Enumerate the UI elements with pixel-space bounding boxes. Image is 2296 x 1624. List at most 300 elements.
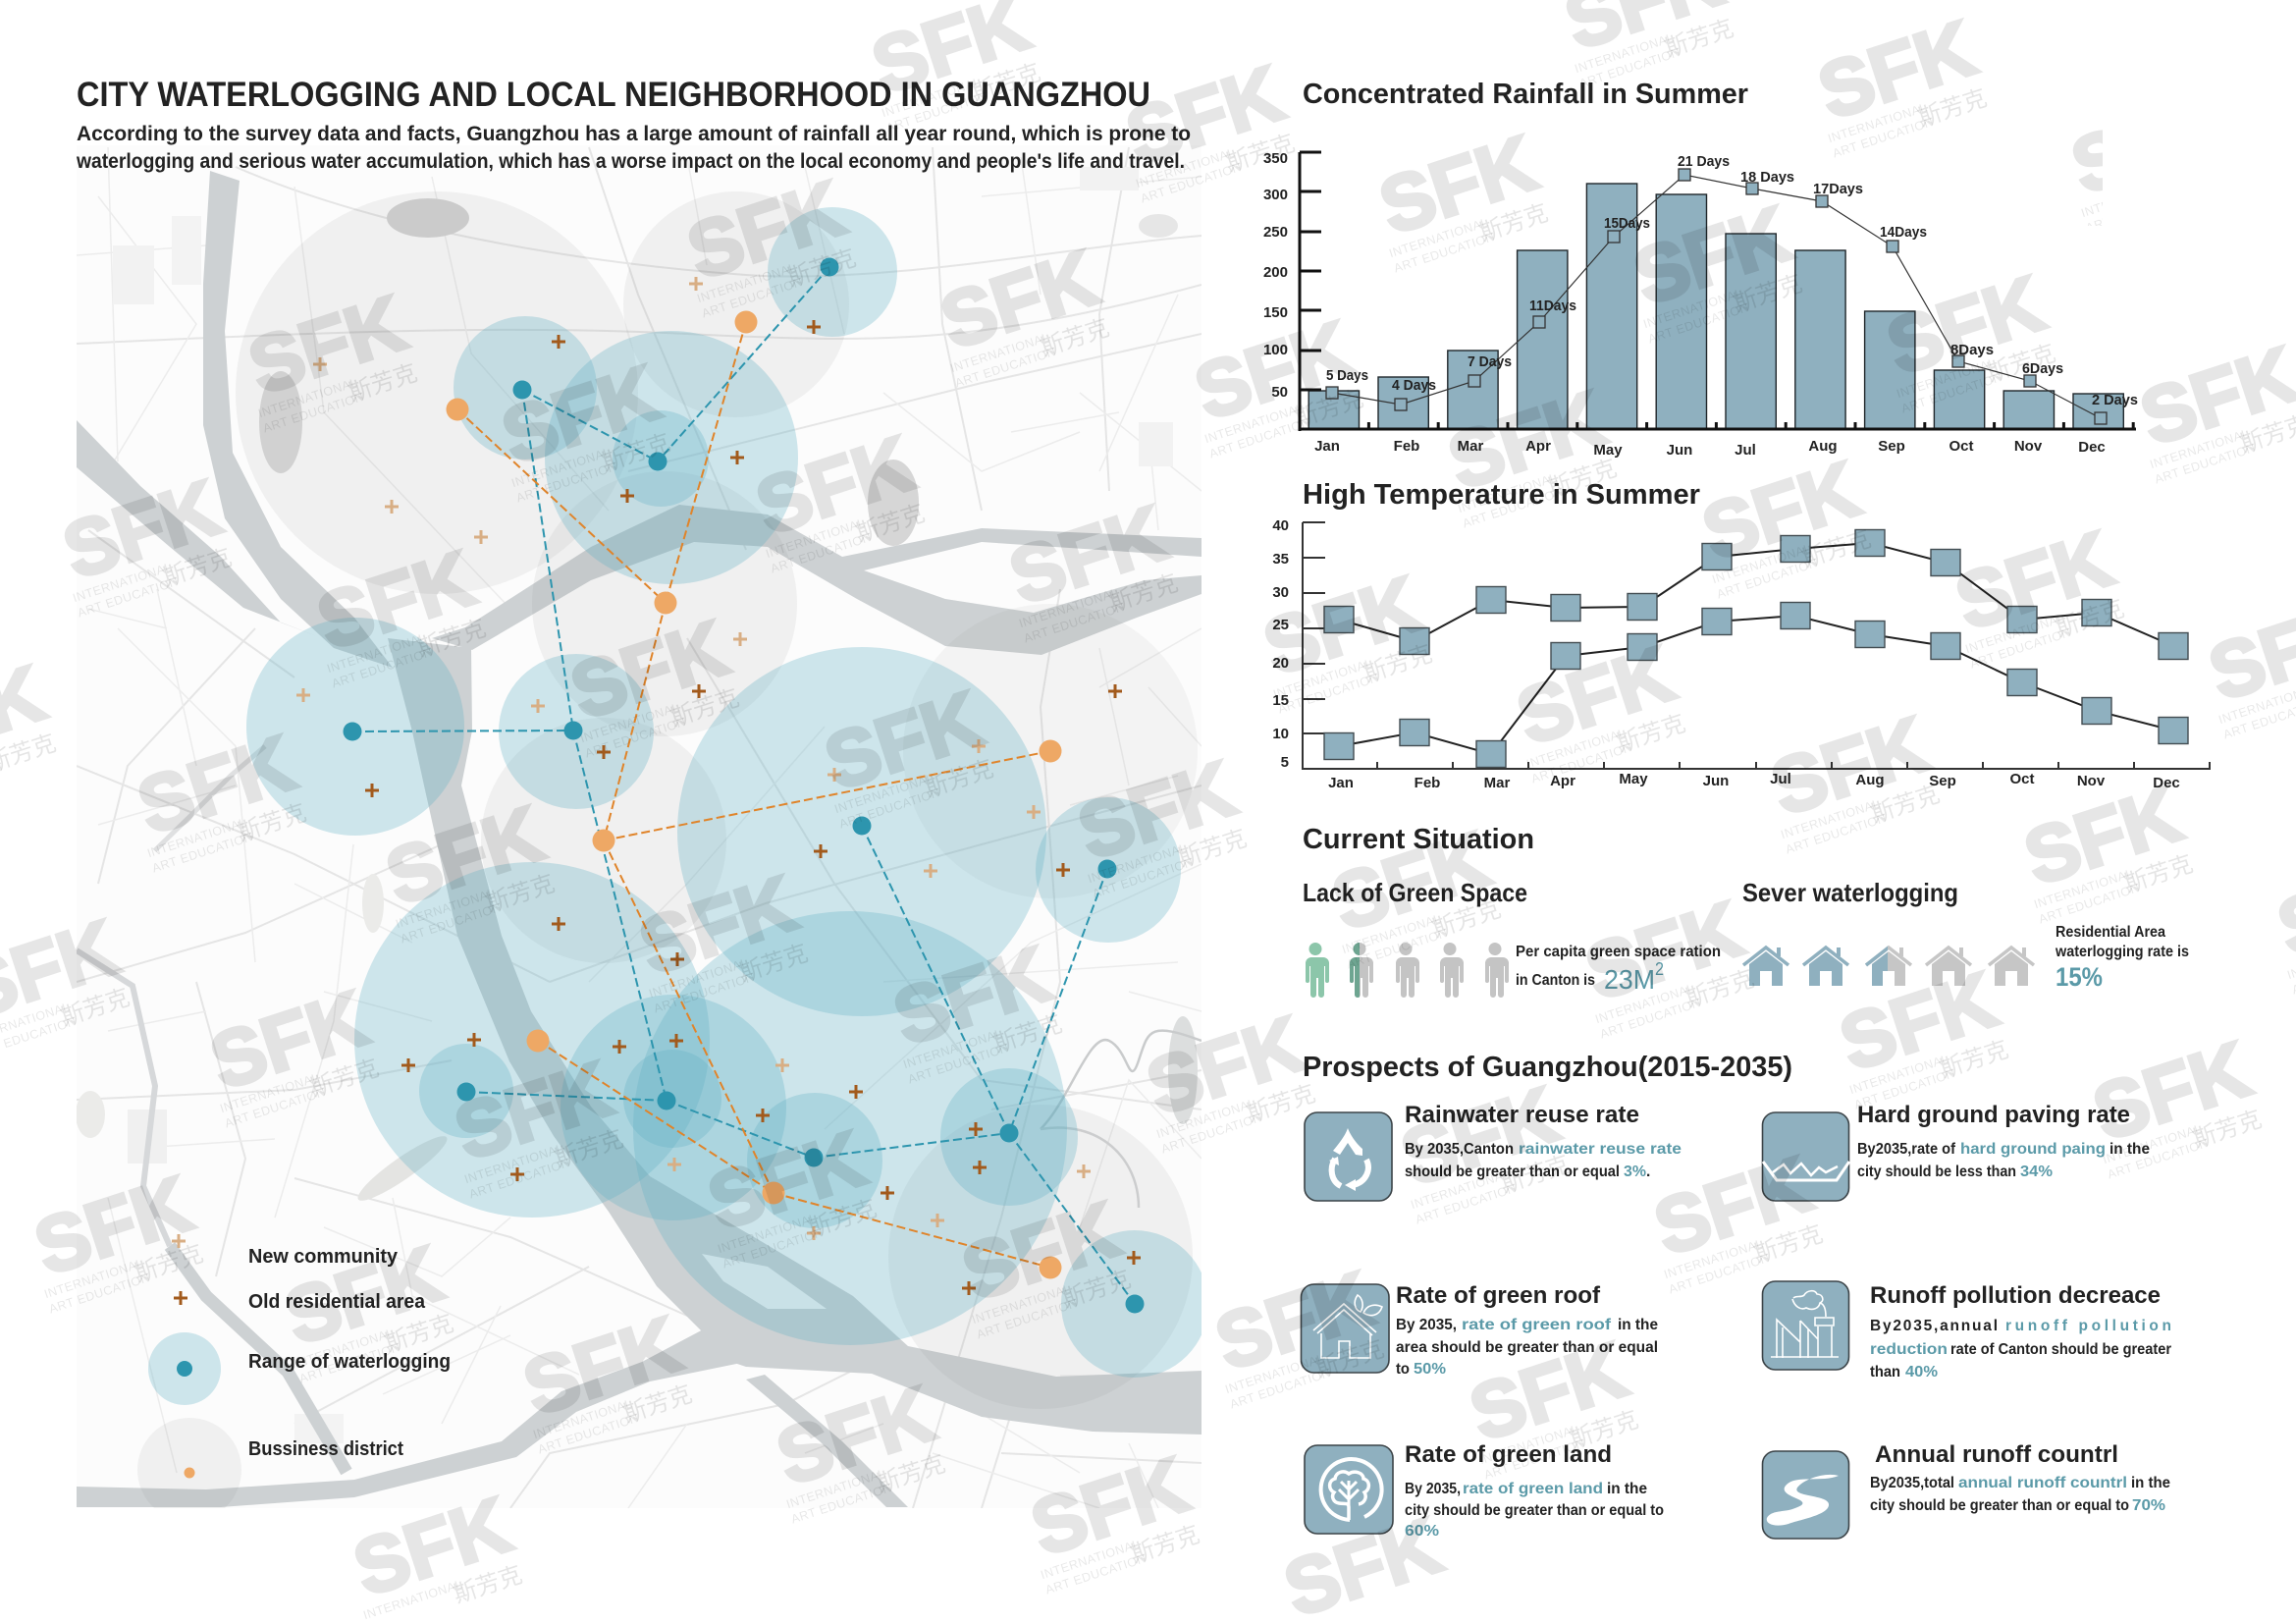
map legend: Old residential area <box>248 1291 426 1313</box>
watermark pattern: INTERNATIONAL <box>901 1026 1004 1071</box>
bar chart: rainfall with rainy days line: 7 Days <box>1468 354 1512 370</box>
description: rate of green roof <box>1462 1317 1612 1333</box>
watermark pattern: INTERNATIONAL <box>784 1466 887 1511</box>
watermark pattern: SFK <box>1021 1440 1198 1572</box>
panel: sever waterlogging: Sever waterlogging <box>1742 878 1958 907</box>
watermark pattern: INTERNATIONAL <box>531 1396 634 1441</box>
watermark pattern: SFK <box>767 1370 943 1501</box>
watermark pattern: 斯芳克 <box>1312 1335 1387 1382</box>
watermark pattern: 斯芳克 <box>667 684 742 731</box>
watermark pattern: ART EDUCATION <box>1414 1181 1519 1226</box>
line chart: high and low temperature: 5 <box>1281 754 1289 771</box>
icon: houses row <box>1743 947 2034 986</box>
watermark pattern: SFK <box>275 1229 452 1361</box>
watermark pattern: 斯芳克 <box>2190 1106 2265 1153</box>
panel: rate of green land <box>1305 1441 1664 1540</box>
description: rainwater reuse rate <box>1519 1141 1682 1158</box>
watermark pattern: SFK <box>999 489 1176 621</box>
watermark pattern: ART EDUCATION <box>884 89 989 135</box>
watermark pattern: 斯芳克 <box>2053 595 2127 642</box>
watermark pattern: SFK <box>1575 885 1752 1016</box>
business district network lines <box>457 322 1050 1268</box>
watermark pattern: 斯芳克 <box>853 500 928 547</box>
watermark pattern: ART EDUCATION <box>514 460 619 505</box>
watermark pattern: SFK <box>1830 955 2006 1087</box>
watermark pattern: INTERNATIONAL <box>1895 355 1998 401</box>
watermark pattern: INTERNATIONAL <box>462 1141 565 1186</box>
watermark pattern: SFK <box>2061 79 2238 210</box>
watermark pattern: INTERNATIONAL <box>1477 1422 1580 1467</box>
heading: Runoff pollution decreace <box>1870 1282 2161 1309</box>
watermark pattern: ART EDUCATION <box>1646 300 1751 346</box>
watermark pattern: INTERNATIONAL <box>716 1211 819 1256</box>
description <box>1405 1141 1682 1180</box>
watermark pattern: INTERNATIONAL <box>42 1256 145 1301</box>
description: than <box>1870 1364 1900 1380</box>
green space statistic: 23M <box>1604 964 1655 995</box>
watermark pattern: ART EDUCATION <box>1852 1066 1957 1111</box>
watermark pattern: ART EDUCATION <box>2106 1136 2211 1181</box>
description: 34% <box>2020 1164 2053 1180</box>
watermark pattern: ART EDUCATION <box>1784 811 1889 856</box>
watermark pattern: ART EDUCATION <box>1667 1251 1772 1296</box>
watermark pattern: 斯芳克 <box>784 244 859 292</box>
description: in the <box>1607 1481 1647 1497</box>
watermark pattern: INTERNATIONAL <box>1134 145 1237 190</box>
watermark pattern: INTERNATIONAL <box>1154 1096 1257 1141</box>
bar chart: rainfall with rainy days line: Jan <box>1314 438 1340 455</box>
bar chart: rainfall with rainy days line: 150 <box>1263 304 1288 321</box>
watermark pattern: 斯芳克 <box>1244 1080 1318 1127</box>
waterlogging statistic <box>2055 924 2189 992</box>
watermark pattern: INTERNATIONAL <box>218 1070 321 1115</box>
description: annual runoff countrl <box>1958 1475 2127 1491</box>
watermark pattern: 斯芳克 <box>922 755 996 802</box>
icon: factory with smoke <box>1763 1281 1849 1370</box>
bar chart: rainfall with rainy days line: 200 <box>1263 264 1288 281</box>
watermark pattern: SFK <box>1692 445 1869 576</box>
watermark pattern: INTERNATIONAL <box>1662 1236 1765 1281</box>
watermark pattern: INTERNATIONAL <box>1223 1351 1326 1396</box>
green space statistic: 2 <box>1655 959 1664 979</box>
watermark pattern: SFK <box>1322 815 1499 947</box>
line chart: high and low temperature: Aug <box>1855 772 1885 788</box>
intro text: According to the survey data and facts, Guangzhou has a large amount of rainfall all year round, which is prone to <box>77 123 1191 145</box>
intro text <box>76 123 1191 173</box>
watermark pattern: SFK <box>25 1160 201 1291</box>
bar chart: rainfall with rainy days line: 18 Days <box>1740 170 1794 186</box>
watermark pattern: ART EDUCATION <box>150 830 255 875</box>
watermark pattern: 斯芳克 <box>1292 385 1366 432</box>
watermark pattern: INTERNATIONAL <box>1641 286 1744 331</box>
watermark pattern: SFK <box>492 349 668 480</box>
watermark pattern: INTERNATIONAL <box>1387 215 1490 260</box>
description <box>1396 1317 1658 1378</box>
watermark pattern: ART EDUCATION <box>2037 881 2142 926</box>
watermark pattern: ART EDUCATION <box>1228 1366 1333 1411</box>
watermark pattern: SFK <box>815 675 991 806</box>
description: should be greater than or equal <box>1405 1164 1620 1180</box>
watermark pattern: ART EDUCATION <box>700 275 805 320</box>
bar chart: rainfall with rainy days line: 15Days <box>1604 216 1650 232</box>
watermark pattern: INTERNATIONAL <box>145 815 248 860</box>
bar chart: rainfall with rainy days line: Sep <box>1878 438 1905 455</box>
watermark pattern: 斯芳克 <box>1731 270 1805 317</box>
watermark pattern: INTERNATIONAL <box>1963 611 2066 656</box>
line chart: high and low temperature: 35 <box>1272 551 1289 568</box>
waterlogging statistic: 15% <box>2056 962 2103 992</box>
bar chart: rainfall with rainy days line: 300 <box>1263 187 1288 203</box>
waterlogging statistic: Residential Area <box>2056 924 2165 941</box>
watermark pattern: 斯芳克 <box>1476 199 1551 246</box>
line chart: high and low temperature: Apr <box>1550 773 1575 789</box>
watermark pattern: 斯芳克 <box>874 1450 948 1497</box>
description: in the <box>1618 1317 1658 1333</box>
description: city should be greater than or equal to <box>1870 1497 2129 1514</box>
watermark pattern: SFK <box>1068 744 1245 876</box>
watermark pattern: 斯芳克 <box>483 870 558 917</box>
watermark pattern: SFK <box>1507 629 1683 761</box>
line chart: high and low temperature: 25 <box>1272 617 1289 633</box>
watermark pattern: ART EDUCATION <box>297 1340 402 1385</box>
watermark pattern: ART EDUCATION <box>1577 45 1682 90</box>
description: . <box>1646 1164 1650 1180</box>
watermark pattern: ART EDUCATION <box>1715 556 1820 601</box>
watermark pattern: INTERNATIONAL <box>1017 585 1120 630</box>
waterlogging network lines <box>352 267 1135 1304</box>
watermark pattern: 斯芳克 <box>1937 1036 2011 1083</box>
watermark pattern: ART EDUCATION <box>789 1481 894 1526</box>
watermark pattern: 斯芳克 <box>414 615 489 662</box>
watermark pattern: ART EDUCATION <box>1022 600 1127 645</box>
watermark pattern: SFK <box>1808 4 1985 135</box>
bar chart: rainfall with rainy days line: 50 <box>1271 384 1288 401</box>
watermark pattern: ART EDUCATION <box>261 390 366 435</box>
watermark pattern: ART EDUCATION <box>1461 485 1566 530</box>
watermark pattern: INTERNATIONAL <box>1779 796 1882 841</box>
watermark pattern: INTERNATIONAL <box>2079 175 2182 220</box>
heading: Rate of green land <box>1405 1441 1612 1468</box>
description: By 2035,Canton <box>1405 1141 1514 1158</box>
watermark pattern: INTERNATIONAL <box>880 75 983 120</box>
watermark pattern: INTERNATIONAL <box>1573 30 1676 76</box>
watermark pattern: ART EDUCATION <box>837 785 942 831</box>
description: By2035,annual <box>1870 1318 1998 1334</box>
heading: Hard ground paving rate <box>1857 1102 2130 1128</box>
watermark pattern: INTERNATIONAL <box>1826 100 1929 145</box>
watermark pattern: 斯芳克 <box>160 544 235 591</box>
description: hard ground paing <box>1960 1141 2106 1158</box>
icon: hard ground basin <box>1763 1112 1849 1201</box>
description: in the <box>2109 1141 2150 1158</box>
watermark pattern: ART EDUCATION <box>1091 855 1196 900</box>
watermark pattern: SFK <box>1644 1140 1821 1272</box>
waterlogging statistic: waterlogging rate is <box>2055 944 2189 960</box>
line chart: high and low temperature: 15 <box>1272 692 1289 709</box>
watermark pattern: SFK <box>307 534 484 666</box>
watermark pattern: 斯芳克 <box>1662 15 1736 62</box>
watermark pattern: ART EDUCATION <box>467 1156 572 1201</box>
watermark pattern: 斯芳克 <box>307 1055 382 1102</box>
map legend: New community <box>248 1246 399 1268</box>
description <box>1870 1318 2171 1380</box>
watermark pattern: SFK <box>952 1185 1129 1317</box>
watermark pattern: 斯芳克 <box>451 1561 525 1608</box>
watermark pattern: SFK <box>883 930 1060 1061</box>
watermark pattern: ART EDUCATION <box>1276 671 1381 716</box>
watermark pattern: SFK <box>561 604 737 735</box>
line chart: high and low temperature: 10 <box>1272 726 1289 742</box>
description: in the <box>2131 1475 2170 1491</box>
line chart: high and low temperature: Dec <box>2153 775 2180 791</box>
map legend: Range of waterlogging <box>248 1351 451 1373</box>
bar chart: rainfall with rainy days line: 250 <box>1263 224 1288 241</box>
watermark pattern: SFK <box>1391 1070 1568 1202</box>
bar chart: rainfall with rainy days line: Dec <box>2078 439 2106 456</box>
watermark pattern: INTERNATIONAL <box>1710 541 1813 586</box>
bar chart: rainfall with rainy days line: 2 Days <box>2092 393 2138 408</box>
watermark pattern: INTERNATIONAL <box>1847 1052 1950 1097</box>
watermark pattern: SFK <box>1761 700 1938 832</box>
watermark pattern: ART EDUCATION <box>975 1296 1080 1341</box>
watermark pattern: 斯芳克 <box>1682 965 1757 1012</box>
map panel <box>76 145 1208 1522</box>
watermark pattern: INTERNATIONAL <box>1340 911 1443 956</box>
watermark pattern: 斯芳克 <box>1614 710 1688 757</box>
description: city should be less than <box>1857 1164 2016 1180</box>
watermark pattern: ART EDUCATION <box>399 900 504 946</box>
watermark pattern: ART EDUCATION <box>1207 415 1312 460</box>
business district ranges <box>137 191 1198 1522</box>
watermark pattern: SFK <box>1185 304 1362 436</box>
line chart: high and low temperature: Jan <box>1328 775 1354 791</box>
watermark pattern: 斯芳克 <box>1498 1151 1573 1198</box>
watermark pattern: ART EDUCATION <box>1482 1436 1587 1482</box>
watermark pattern: ART EDUCATION <box>953 345 1058 390</box>
watermark pattern: ART EDUCATION <box>1831 115 1936 160</box>
bar chart: rainfall with rainy days line: May <box>1593 442 1623 459</box>
watermark pattern: ART EDUCATION <box>906 1041 1011 1086</box>
watermark pattern: SFK <box>1254 560 1430 691</box>
bar chart: rainfall with rainy days line: Feb <box>1394 438 1419 455</box>
heading: Rate of green roof <box>1396 1282 1601 1309</box>
description: reduction <box>1870 1341 1948 1358</box>
heading: prospects: Prospects of Guangzhou(2015-2035) <box>1303 1052 1792 1083</box>
watermark pattern: SFK <box>1137 1000 1313 1131</box>
bar chart: rainfall with rainy days line: Mar <box>1458 438 1483 455</box>
line chart: high and low temperature: Sep <box>1929 773 1956 789</box>
line chart: high and low temperature: Jul <box>1770 771 1791 787</box>
watermark pattern: SFK <box>1369 119 1546 250</box>
bar chart: rainfall with rainy days line: Oct <box>1949 438 1974 455</box>
panel: rainwater reuse rate <box>1305 1102 1682 1201</box>
watermark pattern: INTERNATIONAL <box>1086 840 1189 886</box>
watermark pattern: ART EDUCATION <box>1392 230 1497 275</box>
bar chart: rainfall with rainy days line: Nov <box>2014 438 2043 455</box>
heading: rainfall: Concentrated Rainfall in Summer <box>1303 79 1748 110</box>
watermark pattern: 斯芳克 <box>1106 569 1181 617</box>
watermark pattern: ART EDUCATION <box>1159 1110 1264 1156</box>
watermark pattern: SFK <box>53 463 230 595</box>
watermark pattern: ART EDUCATION <box>536 1411 641 1456</box>
watermark pattern: SFK <box>513 1300 690 1432</box>
bar chart: rainfall with rainy days line: 21 Days <box>1678 154 1730 170</box>
panel: runoff pollution decreace <box>1763 1281 2171 1380</box>
watermark pattern: INTERNATIONAL <box>1039 1537 1142 1582</box>
watermark pattern: 斯芳克 <box>1175 825 1250 872</box>
watermark pattern: INTERNATIONAL <box>764 515 867 561</box>
watermark pattern: SFK <box>344 1481 520 1612</box>
watermark pattern: INTERNATIONAL <box>970 1281 1073 1326</box>
watermark pattern: ART EDUCATION <box>47 1271 152 1316</box>
watermark pattern: SFK <box>2083 1025 2260 1157</box>
panel: sever waterlogging <box>1742 878 2189 992</box>
watermark pattern: 斯芳克 <box>132 1240 206 1287</box>
watermark pattern: SFK <box>1877 259 2054 391</box>
description: 60% <box>1405 1523 1439 1540</box>
watermark pattern: SFK <box>1624 189 1800 321</box>
line chart: high and low temperature: 30 <box>1272 584 1289 601</box>
watermark pattern: INTERNATIONAL <box>2101 1121 2204 1166</box>
watermark pattern: 斯芳克 <box>58 984 133 1031</box>
description: By 2035, <box>1405 1481 1461 1497</box>
heading: temperature: High Temperature in Summer <box>1303 479 1700 511</box>
line chart: high and low temperature: Oct <box>2009 771 2035 787</box>
watermark pattern: 斯芳克 <box>990 1010 1065 1057</box>
description <box>1857 1141 2150 1180</box>
watermark pattern: ART EDUCATION <box>652 970 757 1015</box>
line chart: high and low temperature: 20 <box>1272 655 1289 672</box>
watermark pattern: SFK <box>1946 514 2122 646</box>
green space statistic <box>1516 944 1721 995</box>
bar chart: rainfall with rainy days line: Apr <box>1525 438 1551 455</box>
watermark pattern: 斯芳克 <box>620 1380 695 1428</box>
watermark pattern: INTERNATIONAL <box>1409 1166 1512 1212</box>
watermark pattern: SFK <box>698 1114 875 1246</box>
watermark pattern: 斯芳克 <box>1545 455 1620 502</box>
watermark pattern: ART EDUCATION <box>583 715 688 760</box>
watermark pattern: ART EDUCATION <box>2084 189 2189 235</box>
description: rate of Canton should be greater <box>1950 1341 2171 1358</box>
watermark pattern: 斯芳克 <box>1799 525 1874 572</box>
watermark pattern: SFK <box>1116 49 1293 181</box>
watermark pattern: INTERNATIONAL <box>1593 981 1696 1026</box>
watermark pattern: INTERNATIONAL <box>832 771 935 816</box>
watermark pattern: SFK <box>931 234 1107 365</box>
icon: people row <box>1306 943 1509 998</box>
bar chart: rainfall with rainy days line: Aug <box>1808 438 1838 455</box>
watermark pattern: SFK <box>746 419 923 551</box>
watermark pattern: ART EDUCATION <box>1598 996 1703 1041</box>
heading: current situation: Current Situation <box>1303 824 1534 855</box>
bar chart: rainfall with rainy days line <box>1263 150 2138 459</box>
watermark pattern: 斯芳克 <box>1751 1220 1826 1268</box>
watermark pattern: 斯芳克 <box>1915 84 1990 132</box>
watermark pattern: 斯芳克 <box>805 1195 880 1242</box>
watermark pattern: INTERNATIONAL <box>509 445 613 490</box>
bar chart: rainfall with rainy days line: 5 Days <box>1326 368 1368 384</box>
watermark pattern: 斯芳克 <box>1429 895 1504 943</box>
bar chart: rainfall with rainy days line: Jun <box>1667 442 1692 459</box>
watermark pattern: 斯芳克 <box>1361 640 1435 687</box>
watermark pattern: 斯芳克 <box>552 1125 626 1172</box>
watermark pattern: SFK <box>1460 1326 1636 1457</box>
watermark pattern: ART EDUCATION <box>76 574 181 620</box>
panel: hard ground paving rate <box>1763 1102 2150 1201</box>
watermark pattern: ART EDUCATION <box>1968 625 2073 671</box>
bar chart: rainfall with rainy days line: 14Days <box>1880 225 1927 241</box>
waterlogging ranges <box>148 207 1208 1405</box>
watermark pattern: ART EDUCATION <box>1043 1551 1148 1597</box>
description: By2035,rate of <box>1857 1141 1956 1158</box>
line chart: high and low temperature: Feb <box>1415 775 1440 791</box>
watermark pattern: 斯芳克 <box>1038 314 1112 361</box>
title: CITY WATERLOGGING AND LOCAL NEIGHBORHOOD IN GUANGZHOU <box>77 76 1150 114</box>
description: to <box>1396 1361 1410 1378</box>
watermark pattern: SFK <box>2014 770 2191 901</box>
watermark pattern: SFK <box>629 859 806 991</box>
watermark pattern: INTERNATIONAL <box>2032 866 2135 911</box>
watermark pattern: INTERNATIONAL <box>325 630 428 676</box>
bar chart: rainfall with rainy days line: Jul <box>1735 442 1756 459</box>
watermark pattern: SFK <box>1205 1255 1382 1386</box>
watermark pattern: INTERNATIONAL <box>1271 656 1374 701</box>
watermark pattern: SFK <box>128 719 304 850</box>
new community markers <box>172 277 1091 1248</box>
watermark pattern: 斯芳克 <box>736 940 811 987</box>
line chart: high and low temperature: Nov <box>2077 773 2106 789</box>
watermark pattern: ART EDUCATION <box>1139 160 1244 205</box>
panel: rate of green roof <box>1302 1282 1658 1378</box>
heading: Annual runoff countrl <box>1875 1441 2118 1468</box>
heading: Rainwater reuse rate <box>1405 1102 1639 1128</box>
green space statistic: Per capita green space ration <box>1516 944 1721 960</box>
bar chart: rainfall with rainy days line: 100 <box>1263 342 1288 358</box>
base map with roads and rivers <box>76 145 1201 1508</box>
watermark pattern: 斯芳克 <box>1059 1266 1134 1313</box>
watermark pattern: 斯芳克 <box>1128 1521 1202 1568</box>
watermark pattern: ART EDUCATION <box>1529 740 1634 785</box>
watermark pattern: ART EDUCATION <box>1899 370 2004 415</box>
watermark pattern: INTERNATIONAL <box>1524 726 1628 771</box>
watermark pattern: 斯芳克 <box>1223 130 1298 177</box>
watermark pattern: INTERNATIONAL <box>948 330 1051 375</box>
watermark pattern: 斯芳克 <box>382 1310 456 1357</box>
description: By2035,total <box>1870 1475 1954 1491</box>
icon: house with leaves <box>1302 1284 1389 1373</box>
watermark pattern: INTERNATIONAL <box>256 375 359 420</box>
description: 3% <box>1624 1164 1646 1180</box>
watermark pattern: INTERNATIONAL <box>578 700 681 745</box>
line chart: high and low temperature: Mar <box>1484 775 1510 791</box>
business district points <box>185 310 1062 1479</box>
watermark pattern: SFK <box>239 279 415 410</box>
watermark pattern: SFK <box>200 974 377 1106</box>
watermark pattern: 斯芳克 <box>1567 1406 1641 1453</box>
watermark pattern: SFK <box>376 789 553 921</box>
watermark pattern: INTERNATIONAL <box>1202 401 1306 446</box>
watermark pattern: ART EDUCATION <box>721 1225 826 1271</box>
description <box>1870 1475 2170 1514</box>
panel: lack of green space <box>1303 878 1721 998</box>
description: runoff pollution <box>2005 1318 2171 1334</box>
watermark pattern: SFK <box>1438 374 1615 506</box>
map legend <box>248 1246 451 1460</box>
bar chart: rainfall with rainy days line: 17Days <box>1813 182 1863 197</box>
watermark pattern: SFK <box>445 1045 621 1176</box>
description: By 2035, <box>1396 1317 1457 1333</box>
bar chart: rainfall with rainy days line: 11Days <box>1529 298 1576 314</box>
